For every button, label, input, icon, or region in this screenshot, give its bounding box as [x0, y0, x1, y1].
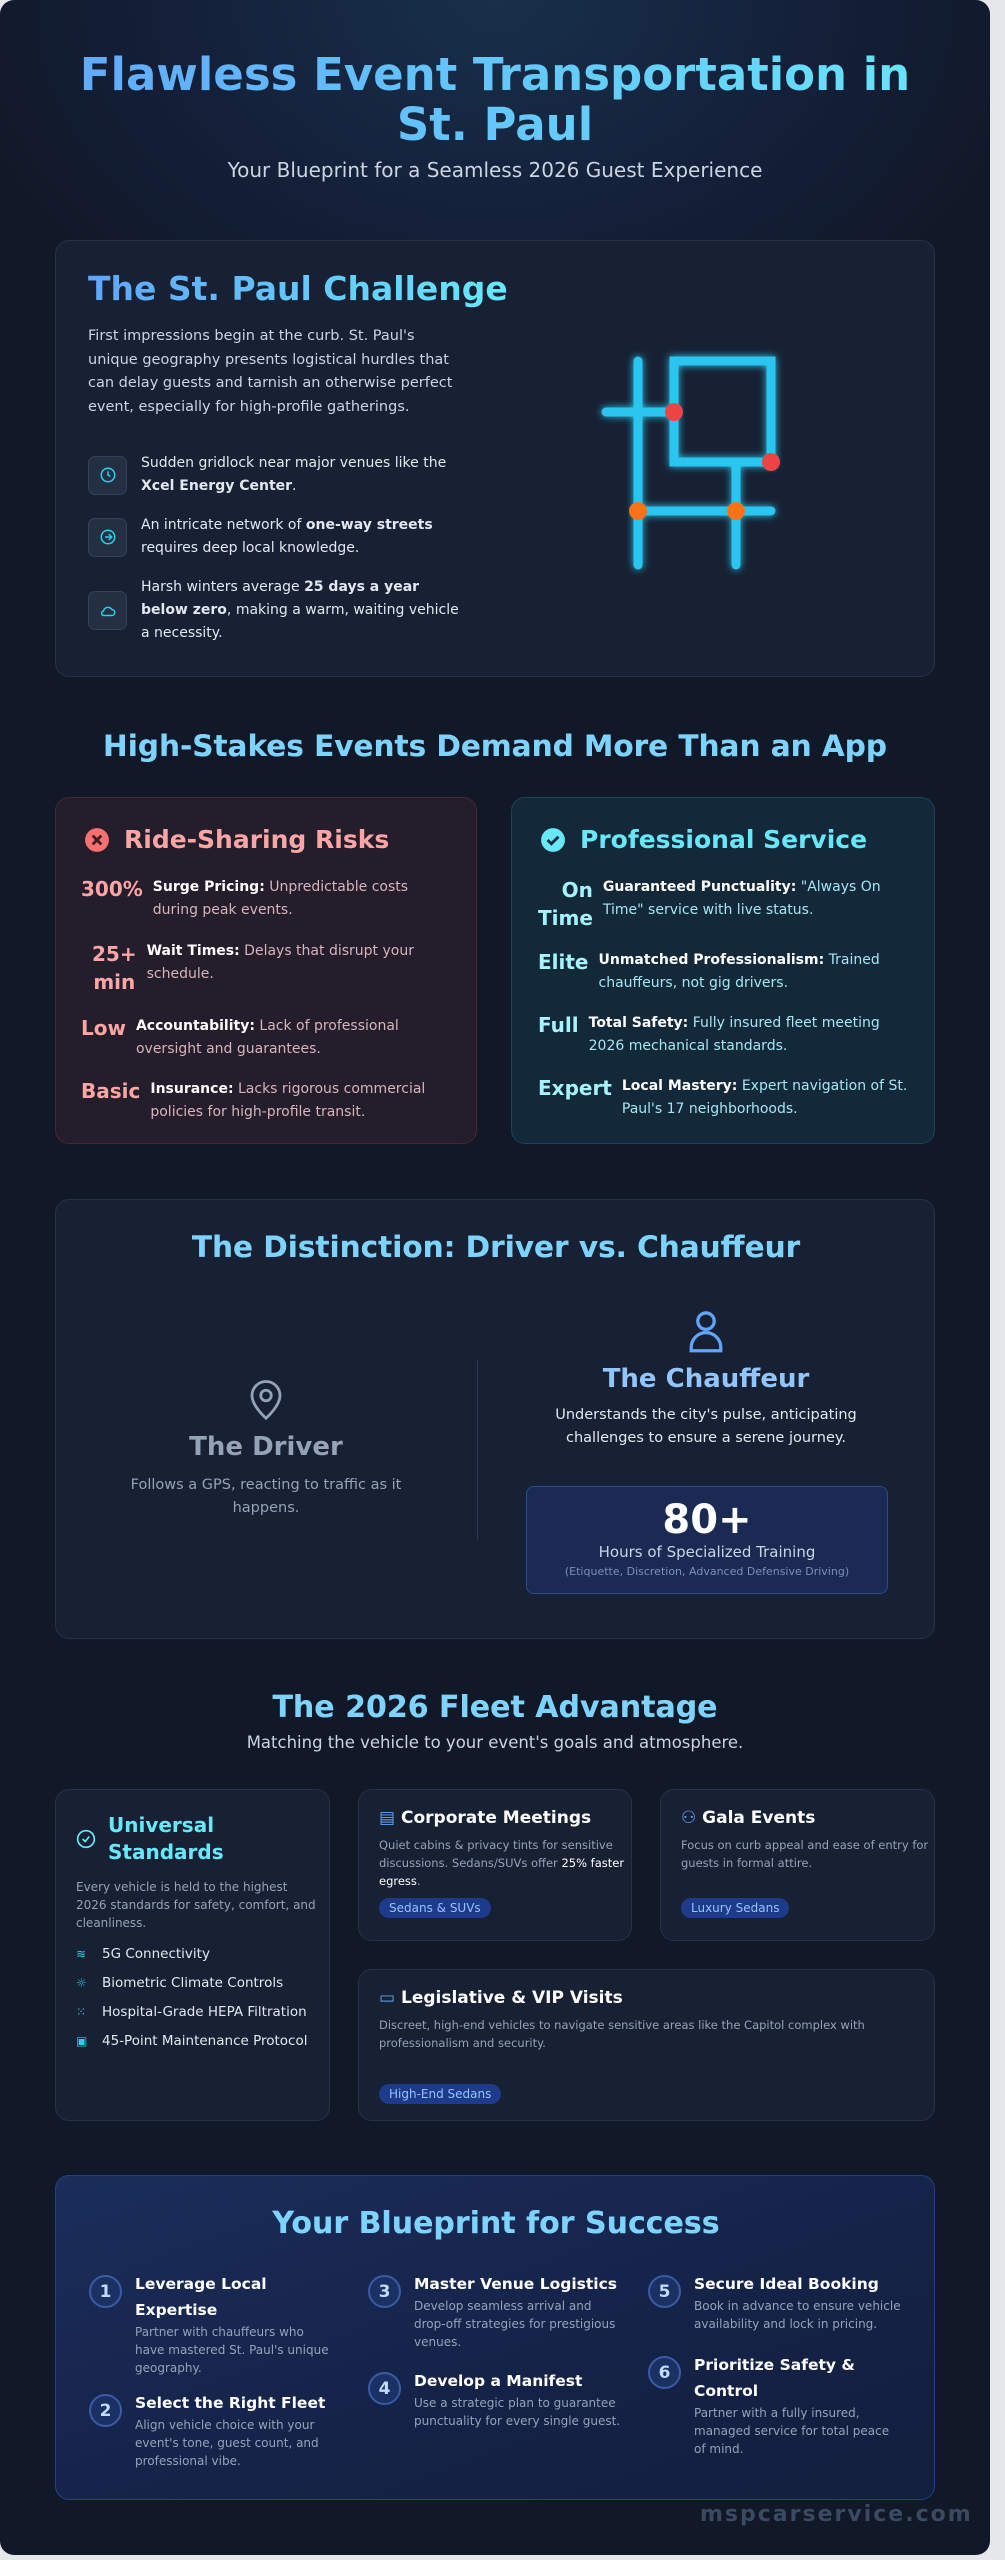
risk: wait: Wait Times: Delays that disrupt your schedule. — [147, 943, 414, 982]
step 1 — [89, 2275, 122, 2308]
step 2 — [89, 2394, 122, 2427]
card: corporate meetings — [358, 1789, 632, 1941]
column: chauffeur — [555, 1311, 857, 1446]
text: universal: Every vehicle is held to the highest 2026 standards for safety, comfort, and cleanliness. — [76, 1880, 316, 1930]
title — [0, 50, 990, 150]
title: St. Paul — [397, 98, 593, 151]
panel: universal standards — [55, 1789, 330, 2121]
feature list — [76, 1946, 308, 2049]
map graphic — [596, 350, 782, 574]
feature list: ⁙ — [76, 2005, 86, 2019]
column: driver: The Driver — [189, 1432, 343, 1462]
card: legislative: Discreet, high-end vehicles to navigate sensitive areas like the Capitol complex with professionalism and security. — [379, 2018, 865, 2050]
panel: blueprint: Develop a Manifest — [414, 2372, 582, 2390]
heading: high-stakes: High-Stakes Events Demand More Than an App — [103, 729, 887, 763]
icon: person — [690, 1311, 722, 1352]
column: driver: Follows a GPS, reacting to traffic as it happens. — [131, 1477, 401, 1516]
item: gridlock: Sudden gridlock near major venues like the Xcel Energy Center. — [141, 455, 446, 494]
card: legislative: High-End Sedans — [389, 2087, 491, 2101]
panel: blueprint: Master Venue Logistics — [414, 2275, 617, 2293]
risk: accountability: Low — [81, 1016, 126, 1040]
column: chauffeur: Understands the city's pulse, anticipating challenges to ensure a serene journey. — [555, 1407, 857, 1446]
stat box: 80+ hours: 80+ — [662, 1497, 752, 1543]
item: winters: Harsh winters average 25 days a year below zero, making a warm, waiting vehicle a necessity. — [141, 579, 459, 641]
benefit: on time — [538, 878, 881, 930]
card: corporate meetings: Quiet cabins & privacy tints for sensitive discussions. Sedans/SUVs offer 25% faster egress. — [379, 1838, 624, 1888]
risk: accountability: Accountability: Lack of professional oversight and guarantees. — [136, 1018, 399, 1057]
heading: universal: Standards — [108, 1840, 224, 1864]
subtitle: Your Blueprint for a Seamless 2026 Guest Experience — [228, 158, 762, 182]
step 2: 2 — [100, 2400, 111, 2420]
feature list: Hospital-Grade HEPA Filtration — [102, 2004, 307, 2020]
step 5: 5 — [659, 2282, 670, 2302]
panel: blueprint: Partner with chauffeurs who have mastered St. Paul's unique geography. — [135, 2325, 329, 2375]
risk: wait: 25+ — [92, 942, 137, 966]
risk: surge: Surge Pricing: Unpredictable costs during peak events. — [153, 879, 408, 918]
heading: blueprint — [56, 2206, 936, 2241]
card: legislative — [358, 1969, 935, 2121]
risk: surge: 300% — [81, 877, 143, 901]
heading: challenge: The St. Paul Challenge — [88, 269, 508, 308]
heading: professional: Professional Service — [580, 825, 867, 854]
step 6: 6 — [659, 2362, 670, 2382]
heading: fleet — [0, 1690, 990, 1725]
benefit: full: Full — [538, 1013, 579, 1037]
heading: fleet: The 2026 Fleet Advantage — [272, 1690, 718, 1725]
risk: wait: min — [93, 970, 135, 994]
card: legislative: ▭ Legislative & VIP Visits — [379, 1988, 623, 2008]
panel: blueprint: Partner with a fully insured, managed service for total peace of mind. — [694, 2406, 889, 2456]
divider — [477, 1360, 478, 1540]
panel: blueprint: Develop seamless arrival and drop-off strategies for prestigious venues. — [414, 2299, 615, 2349]
text: challenge intro: First impressions begin at the curb. St. Paul's unique geography presents logistical hurdles that can delay guests and tarnish an otherwise perfect event, especially for high-profile gatherings. — [88, 328, 452, 414]
panel: challenge — [55, 240, 935, 677]
panel: blueprint — [55, 2175, 935, 2500]
panel: blueprint: Leverage Local Expertise — [135, 2275, 267, 2319]
panel: distinction — [55, 1199, 935, 1639]
benefit: expert: Expert — [538, 1076, 612, 1100]
step 4 — [368, 2372, 401, 2405]
heading: risks: Ride-Sharing Risks — [124, 825, 389, 854]
benefit: on time: Time — [538, 906, 593, 930]
title: Flawless Event Transportation in — [80, 48, 910, 101]
benefit: on time: On — [562, 878, 593, 902]
panel: blueprint: Use a strategic plan to guarantee punctuality for every single guest. — [414, 2396, 620, 2428]
panel: professional service — [511, 797, 935, 1144]
column: driver — [131, 1380, 401, 1516]
feature list: ▣ — [76, 2034, 87, 2048]
feature list: ≋ — [76, 1947, 86, 1961]
heading: blueprint: Your Blueprint for Success — [272, 2206, 720, 2241]
card: gala events: ⚇ Gala Events — [681, 1808, 815, 1828]
heading: universal: Universal — [108, 1813, 214, 1837]
panel: blueprint: Secure Ideal Booking — [694, 2275, 879, 2293]
card: corporate meetings: Sedans & SUVs — [389, 1901, 481, 1915]
risk: insurance: Basic — [81, 1079, 140, 1103]
benefit: expert: Local Mastery: Expert navigation of St. Paul's 17 neighborhoods. — [622, 1078, 907, 1117]
panel: blueprint: Book in advance to ensure vehicle availability and lock in pricing. — [694, 2299, 901, 2331]
benefit: elite: Elite — [538, 950, 588, 974]
feature list: ☼ — [76, 1976, 87, 1990]
item: one-way: An intricate network of one-way streets requires deep local knowledge. — [141, 517, 433, 556]
footer: website: mspcarservice.com — [700, 2502, 973, 2527]
panel: blueprint: Align vehicle choice with your event's tone, guest count, and professional vibe. — [135, 2418, 319, 2468]
step 1: 1 — [100, 2282, 111, 2302]
heading: distinction: The Distinction: Driver vs. Chauffeur — [192, 1230, 800, 1264]
card: corporate meetings: ▤ Corporate Meetings — [379, 1808, 591, 1828]
panel: blueprint: Select the Right Fleet — [135, 2394, 325, 2412]
step 5 — [648, 2275, 681, 2308]
card: gala events: Luxury Sedans — [691, 1901, 779, 1915]
card: gala events: Focus on curb appeal and ease of entry for guests in formal attire. — [681, 1838, 928, 1870]
risk: wait — [92, 942, 414, 994]
risk: insurance: Insurance: Lacks rigorous commercial policies for high-profile transit. — [150, 1081, 425, 1120]
stat box: 80+ hours — [526, 1486, 888, 1594]
feature list: Biometric Climate Controls — [102, 1975, 283, 1991]
column: chauffeur: The Chauffeur — [603, 1364, 809, 1394]
stat box: 80+ hours: Hours of Specialized Training — [599, 1543, 815, 1561]
panel: blueprint: Prioritize Safety & Control — [694, 2356, 855, 2400]
card: gala events — [660, 1789, 935, 1941]
heading: distinction — [56, 1230, 936, 1264]
subtitle: fleet: Matching the vehicle to your event's goals and atmosphere. — [247, 1733, 743, 1752]
feature list: 45-Point Maintenance Protocol — [102, 2033, 308, 2049]
feature list: 5G Connectivity — [102, 1946, 210, 1962]
panel: ride-sharing risks — [55, 797, 477, 1144]
benefit: on time: Guaranteed Punctuality: "Always On Time" service with live status. — [603, 879, 881, 918]
stat box: 80+ hours: (Etiquette, Discretion, Advanced Defensive Driving) — [565, 1565, 849, 1578]
benefit: full: Total Safety: Fully insured fleet meeting 2026 mechanical standards. — [589, 1015, 880, 1054]
icon: map pin — [250, 1380, 282, 1420]
benefit: elite: Unmatched Professionalism: Trained chauffeurs, not gig drivers. — [598, 952, 880, 991]
step 6 — [648, 2356, 681, 2389]
step 4: 4 — [379, 2378, 390, 2398]
step 3 — [368, 2275, 401, 2308]
heading: universal — [76, 1813, 224, 1864]
step 3: 3 — [379, 2282, 390, 2302]
